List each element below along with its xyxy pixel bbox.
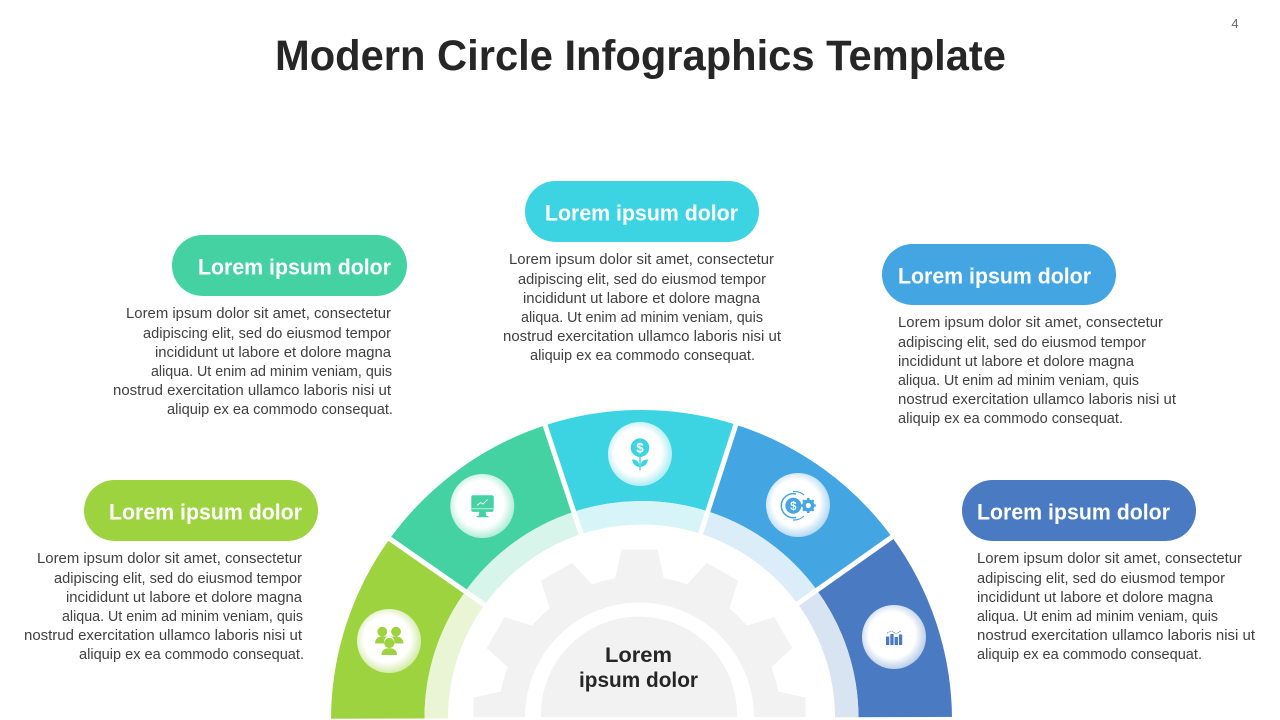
- pill: blue: [882, 244, 1116, 305]
- text block: dark blue: aliquip ex ea commodo consequat.: [977, 647, 1202, 663]
- text block: teal: incididunt ut labore et dolore magna: [155, 345, 392, 361]
- band: light blue: [701, 511, 817, 604]
- text block: cyan: nostrud exercitation ullamco laboris nisi ut: [503, 329, 781, 345]
- band: light teal: [465, 512, 581, 605]
- pill: blue: Lorem ipsum dolor: [898, 264, 1091, 288]
- icon: bar chart: [862, 605, 926, 669]
- text block: blue: nostrud exercitation ullamco laboris nisi ut: [898, 392, 1176, 408]
- center label: Lorem: [605, 644, 672, 667]
- text block: green: adipiscing elit, sed do eiusmod tempor: [54, 571, 302, 587]
- panel: dark blue: [962, 480, 1255, 663]
- text block: cyan: [503, 252, 781, 364]
- text block: cyan: adipiscing elit, sed do eiusmod tempor: [518, 272, 766, 288]
- pill: teal: [172, 235, 407, 296]
- text block: blue: aliqua. Ut enim ad minim veniam, quis: [898, 373, 1139, 389]
- text block: cyan: incididunt ut labore et dolore magna: [523, 291, 761, 307]
- text block: green: [24, 551, 304, 663]
- text block: cyan: aliqua. Ut enim ad minim veniam, quis: [521, 310, 763, 326]
- icon: people: [357, 609, 421, 673]
- text block: blue: [898, 315, 1176, 427]
- center label: ipsum dolor: [579, 669, 698, 692]
- panel: teal: [113, 235, 407, 418]
- band: light green: [424, 591, 485, 719]
- pill: green: Lorem ipsum dolor: [109, 500, 302, 524]
- text block: dark blue: Lorem ipsum dolor sit amet, consectetur: [977, 551, 1242, 567]
- icon: dollar and gear: $: [790, 501, 797, 513]
- pill: dark blue: Lorem ipsum dolor: [977, 500, 1170, 524]
- semicircle diagram: [330, 409, 952, 720]
- text block: blue: adipiscing elit, sed do eiusmod tempor: [898, 335, 1146, 351]
- pill: green: [84, 480, 318, 541]
- text block: dark blue: nostrud exercitation ullamco laboris nisi ut: [977, 628, 1255, 644]
- text block: green: incididunt ut labore et dolore magna: [66, 590, 303, 606]
- center label: [579, 644, 698, 692]
- text block: cyan: aliquip ex ea commodo consequat.: [530, 348, 755, 364]
- text block: dark blue: [977, 551, 1255, 663]
- text block: green: nostrud exercitation ullamco laboris nisi ut: [24, 628, 302, 644]
- text block: teal: aliquip ex ea commodo consequat.: [167, 402, 393, 418]
- gear: [474, 550, 806, 717]
- text block: green: aliquip ex ea commodo consequat.: [79, 647, 304, 663]
- icon: dollar and gear: [766, 473, 830, 537]
- text block: teal: Lorem ipsum dolor sit amet, consectetur: [126, 306, 391, 322]
- segment: blue: [708, 424, 892, 590]
- text block: blue: incididunt ut labore et dolore magna: [898, 354, 1135, 370]
- band: light cyan: [574, 501, 708, 534]
- segment: green: [330, 539, 466, 720]
- text block: dark blue: incididunt ut labore et dolore magna: [977, 590, 1214, 606]
- text block: dark blue: aliqua. Ut enim ad minim veniam, quis: [977, 609, 1218, 625]
- pill: cyan: Lorem ipsum dolor: [545, 200, 738, 226]
- icon: money plant: $: [636, 441, 644, 456]
- text block: teal: aliqua. Ut enim ad minim veniam, quis: [151, 364, 392, 380]
- text block: teal: nostrud exercitation ullamco laboris nisi ut: [113, 383, 391, 399]
- segment: teal: [389, 425, 574, 591]
- text block: green: Lorem ipsum dolor sit amet, consectetur: [37, 551, 302, 567]
- text block: teal: [113, 306, 393, 418]
- pill: cyan: [525, 181, 759, 242]
- text block: blue: Lorem ipsum dolor sit amet, consectetur: [898, 315, 1163, 331]
- text block: cyan: Lorem ipsum dolor sit amet, consectetur: [509, 252, 774, 268]
- band: light dark blue: [798, 590, 859, 718]
- text block: teal: adipiscing elit, sed do eiusmod tempor: [143, 326, 391, 342]
- pill: teal: Lorem ipsum dolor: [198, 254, 391, 280]
- text block: blue: aliquip ex ea commodo consequat.: [898, 411, 1123, 427]
- panel: blue: [882, 244, 1176, 427]
- panel: cyan: [503, 181, 781, 364]
- title: Modern Circle Infographics Template: [275, 32, 1006, 80]
- pill: dark blue: [962, 480, 1196, 541]
- segment: dark blue: [816, 537, 952, 718]
- icon: money plant: [608, 422, 672, 486]
- text block: dark blue: adipiscing elit, sed do eiusmod tempor: [977, 571, 1225, 587]
- segment: cyan: [544, 410, 737, 512]
- panel: green: [24, 480, 318, 663]
- text block: green: aliqua. Ut enim ad minim veniam, quis: [62, 609, 303, 625]
- page number: 4: [1231, 16, 1239, 31]
- icon: monitor with chart: [450, 474, 514, 538]
